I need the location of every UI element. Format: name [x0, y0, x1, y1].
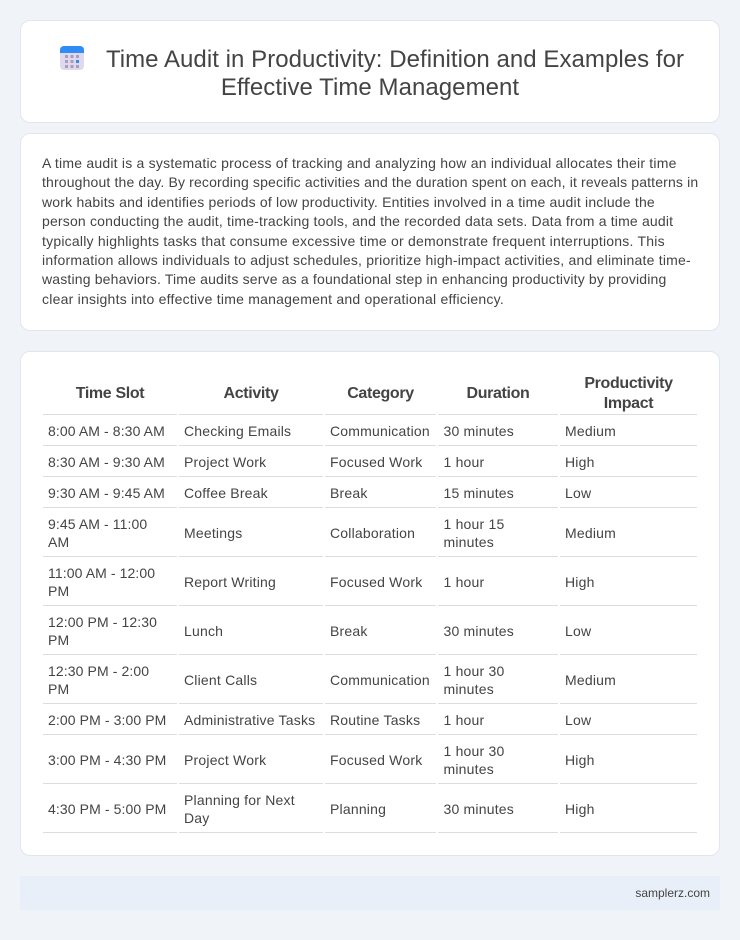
table: daily time audit: Productivity [584, 375, 673, 392]
table: daily time audit: Low [565, 485, 591, 501]
table: daily time audit: minutes [444, 761, 494, 777]
table: daily time audit: Day [184, 810, 210, 826]
text block: definition paragraph: typically highlights tasks that consume excessive time or demonstrate frequent interruptions. This [42, 233, 665, 249]
table: daily time audit: 11:00 AM - 12:00 [48, 565, 155, 581]
table: daily time audit: Medium [565, 423, 616, 439]
table: daily time audit: 1 hour [444, 712, 484, 728]
table: daily time audit: Routine Tasks [330, 712, 420, 728]
table: daily time audit: Break [330, 485, 368, 501]
table: daily time audit: Client Calls [184, 672, 257, 688]
table: daily time audit: 1 hour 15 [444, 516, 504, 532]
table: daily time audit: 12:30 PM - 2:00 [48, 663, 149, 679]
table: daily time audit: High [565, 454, 595, 470]
table: daily time audit: Medium [565, 525, 616, 541]
table: daily time audit: Focused Work [330, 752, 422, 768]
text block: definition paragraph: work habits and identifies periods of low productivity. Entities involved in a time audit include the [42, 194, 655, 210]
table: daily time audit: 9:30 AM - 9:45 AM [48, 485, 165, 501]
table: daily time audit: 30 minutes [444, 423, 514, 439]
table: daily time audit: 8:00 AM - 8:30 AM [48, 423, 165, 439]
table: daily time audit: High [565, 752, 595, 768]
table: daily time audit: 2:00 PM - 3:00 PM [48, 712, 166, 728]
table: daily time audit: 30 minutes [444, 801, 514, 817]
panel: definition card [20, 133, 720, 331]
table: daily time audit: Communication [330, 672, 430, 688]
table: daily time audit: Coffee Break [184, 485, 268, 501]
table: daily time audit: Project Work [184, 454, 266, 470]
table: daily time audit: 8:30 AM - 9:30 AM [48, 454, 165, 470]
table: daily time audit: AM [48, 534, 69, 550]
text block: definition paragraph: A time audit is a systematic process of tracking and analyzing how an individual allocates their time [42, 155, 677, 171]
text block: definition paragraph: clear insights into effective time management and operational efficiency. [42, 291, 504, 307]
table: daily time audit: 15 minutes [444, 485, 514, 501]
table: daily time audit: Communication [330, 423, 430, 439]
table: daily time audit: Low [565, 623, 591, 639]
table: daily time audit: Medium [565, 672, 616, 688]
table: daily time audit: PM [48, 583, 69, 599]
table: daily time audit: Category [347, 385, 414, 402]
table: daily time audit: Lunch [184, 623, 223, 639]
table: daily time audit: Focused Work [330, 454, 422, 470]
table: daily time audit: Collaboration [330, 525, 415, 541]
table: daily time audit: 9:45 AM - 11:00 [48, 516, 147, 532]
table: daily time audit: minutes [444, 534, 494, 550]
panel: time audit table card [20, 351, 720, 856]
table: daily time audit: Duration [466, 385, 529, 402]
icon: calendar [60, 46, 84, 70]
table: daily time audit: 1 hour [444, 454, 484, 470]
table: daily time audit: 3:00 PM - 4:30 PM [48, 752, 166, 768]
table: daily time audit: Break [330, 623, 368, 639]
title [106, 46, 684, 101]
table: daily time audit: Planning [330, 801, 386, 817]
table: daily time audit: PM [48, 632, 69, 648]
text block: definition paragraph: person conducting the audit, time-tracking tools, and the recorded data sets. Data from a time audit [42, 213, 673, 229]
text block: definition paragraph: information allows individuals to adjust schedules, prioritize high-impact activities, and eliminate time- [42, 252, 691, 268]
table: daily time audit: 1 hour [444, 574, 484, 590]
table: daily time audit: Project Work [184, 752, 266, 768]
table: daily time audit: High [565, 574, 595, 590]
table: daily time audit: 12:00 PM - 12:30 [48, 614, 157, 630]
table: daily time audit: PM [48, 681, 69, 697]
table: daily time audit: Administrative Tasks [184, 712, 315, 728]
table: daily time audit: Meetings [184, 525, 242, 541]
table: daily time audit: Activity [224, 385, 278, 402]
table: daily time audit: Checking Emails [184, 423, 291, 439]
table: daily time audit: Time Slot [76, 385, 144, 402]
panel: title card [20, 20, 720, 123]
table: daily time audit: High [565, 801, 595, 817]
text block: definition paragraph: wasting behaviors. Time audits serve as a foundational step in enhancing productivity by providing [42, 271, 666, 287]
table: daily time audit: 4:30 PM - 5:00 PM [48, 801, 166, 817]
title: Time Audit in Productivity: Definition and Examples for [106, 46, 684, 73]
table: daily time audit: minutes [444, 681, 494, 697]
table: daily time audit: 1 hour 30 [444, 743, 504, 759]
table: daily time audit: Low [565, 712, 591, 728]
table: daily time audit: Impact [604, 395, 653, 412]
table: daily time audit: 1 hour 30 [444, 663, 504, 679]
footer: source credit: samplerz.com [635, 886, 710, 900]
text block: definition paragraph: throughout the day. By recording specific activities and the duration spent on each, it reveals patterns in [42, 174, 698, 190]
table: daily time audit: 30 minutes [444, 623, 514, 639]
footer bar [20, 876, 720, 910]
table: daily time audit: Focused Work [330, 574, 422, 590]
text block: definition paragraph [42, 155, 698, 307]
table: daily time audit: Planning for Next [184, 792, 295, 808]
title: Effective Time Management [221, 74, 519, 101]
table: daily time audit: Report Writing [184, 574, 276, 590]
table: daily time audit [43, 375, 697, 833]
